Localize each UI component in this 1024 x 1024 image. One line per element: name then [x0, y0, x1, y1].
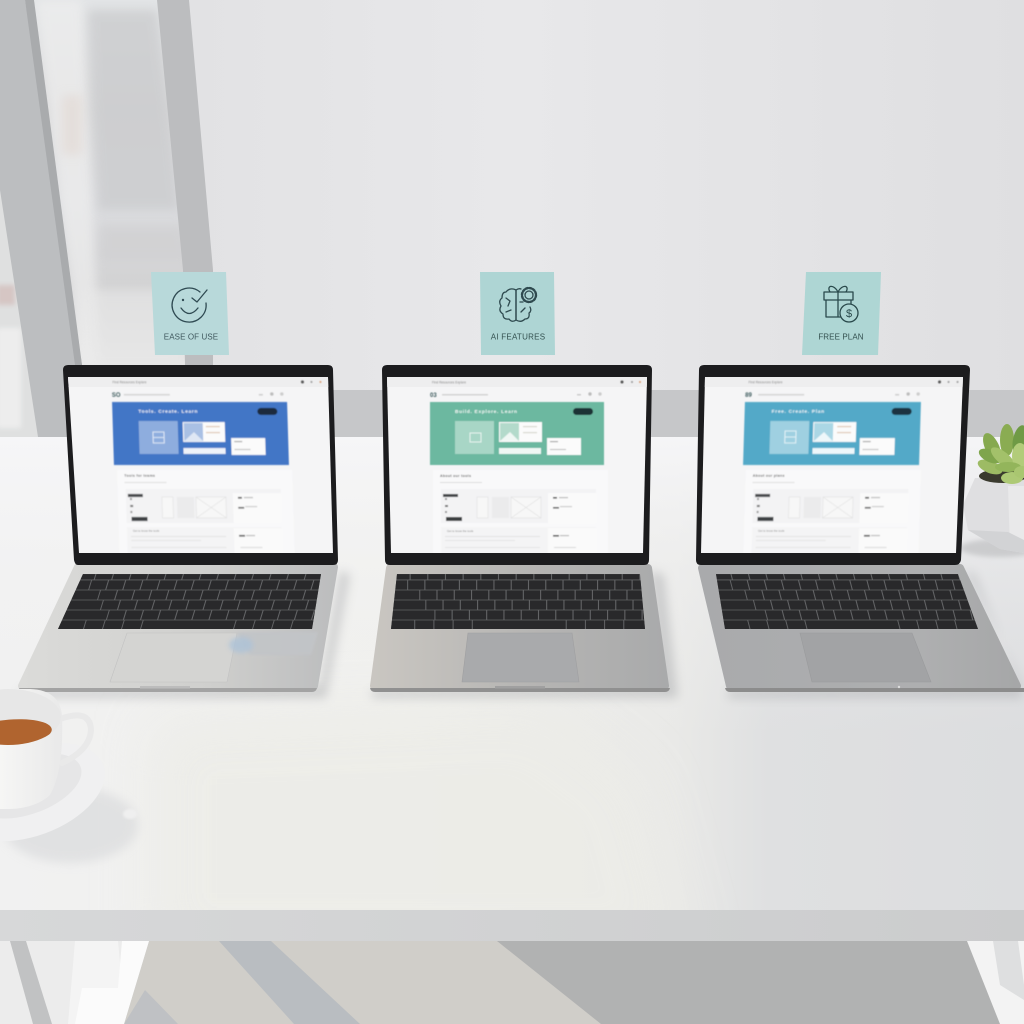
logo and nav 1: SO — [112, 393, 121, 399]
page heading 3: About our plans — [753, 474, 785, 478]
laptop 3 lid — [696, 365, 970, 565]
page heading 2: About our tools — [440, 474, 471, 478]
ledge band behind table — [332, 390, 1024, 438]
succulent leaves — [976, 424, 1024, 484]
table legs — [0, 941, 1024, 1024]
browser bar 2: Find Resources Explore — [432, 380, 466, 384]
tea cup and saucer — [0, 689, 138, 863]
floor — [0, 940, 1024, 1024]
laptop 1 lid — [63, 365, 338, 565]
laptop 1: ease of use — [19, 365, 360, 692]
laptop 2 screen: Get to know the tools — [447, 529, 474, 533]
plant in faceted pot — [960, 424, 1024, 557]
screen reflection glare — [229, 632, 318, 655]
shadow — [2, 787, 138, 863]
label: AI features: AI FEATURES — [491, 332, 545, 342]
banner 1 — [112, 402, 289, 465]
laptop 1 screen: Get to know the tools — [133, 529, 160, 533]
icon: brain with gear — [500, 288, 536, 321]
label: ease of use: EASE OF USE — [164, 332, 218, 342]
banner 2 — [430, 402, 604, 465]
pot — [963, 478, 1024, 553]
laptop 1 base — [19, 567, 360, 692]
banner 1: Tools. Create. Learn — [138, 409, 198, 415]
logo and nav 2: 03 — [430, 393, 437, 399]
browser bar 3: Find Resources Explore — [748, 381, 783, 384]
table front edge — [0, 910, 1024, 941]
pot shadow — [960, 539, 1024, 557]
laptop 2: AI features — [370, 365, 676, 692]
trackpad 2 — [462, 633, 579, 682]
table top — [0, 437, 1024, 960]
laptop 2 base — [370, 568, 676, 692]
browser bar 1: Find Resources Explore — [112, 381, 147, 384]
banner 3: Free. Create. Plan — [772, 409, 825, 415]
laptop 2 lid — [382, 365, 652, 565]
sticky note: ease of use — [151, 272, 229, 355]
banner 3 — [743, 402, 921, 465]
banner 2: Build. Explore. Learn — [455, 409, 518, 415]
laptop 3 screen: Get to know the tools — [758, 529, 785, 533]
keyboard 1 — [58, 574, 321, 629]
handle — [60, 715, 91, 763]
window with blurred city view — [0, 0, 213, 437]
keyboard 3 — [716, 574, 978, 629]
laptop 3 screen — [701, 377, 963, 553]
saucer — [0, 724, 118, 860]
sticky note: AI features — [480, 272, 555, 355]
wall — [0, 0, 1024, 440]
keyboard 2 — [391, 574, 645, 629]
logo and nav 3: 89 — [745, 393, 753, 399]
label: free plan: FREE PLAN — [818, 332, 864, 342]
laptop shadows — [20, 570, 1024, 698]
laptop 3 base — [693, 568, 1024, 692]
cup body — [0, 689, 62, 809]
page heading 1: Tools for teams — [124, 474, 155, 478]
cup interior — [0, 689, 61, 745]
trackpad 3 — [800, 633, 931, 682]
sticky note: free plan — [802, 272, 881, 355]
trackpad 1 — [110, 633, 237, 682]
icon: smiley with check — [172, 288, 207, 322]
tea — [0, 719, 52, 745]
laptop 1 screen — [68, 377, 333, 553]
icon: gift with dollar coin: $ — [846, 308, 852, 320]
laptop 2 screen — [387, 377, 647, 553]
laptop 3: free plan — [693, 365, 1024, 692]
